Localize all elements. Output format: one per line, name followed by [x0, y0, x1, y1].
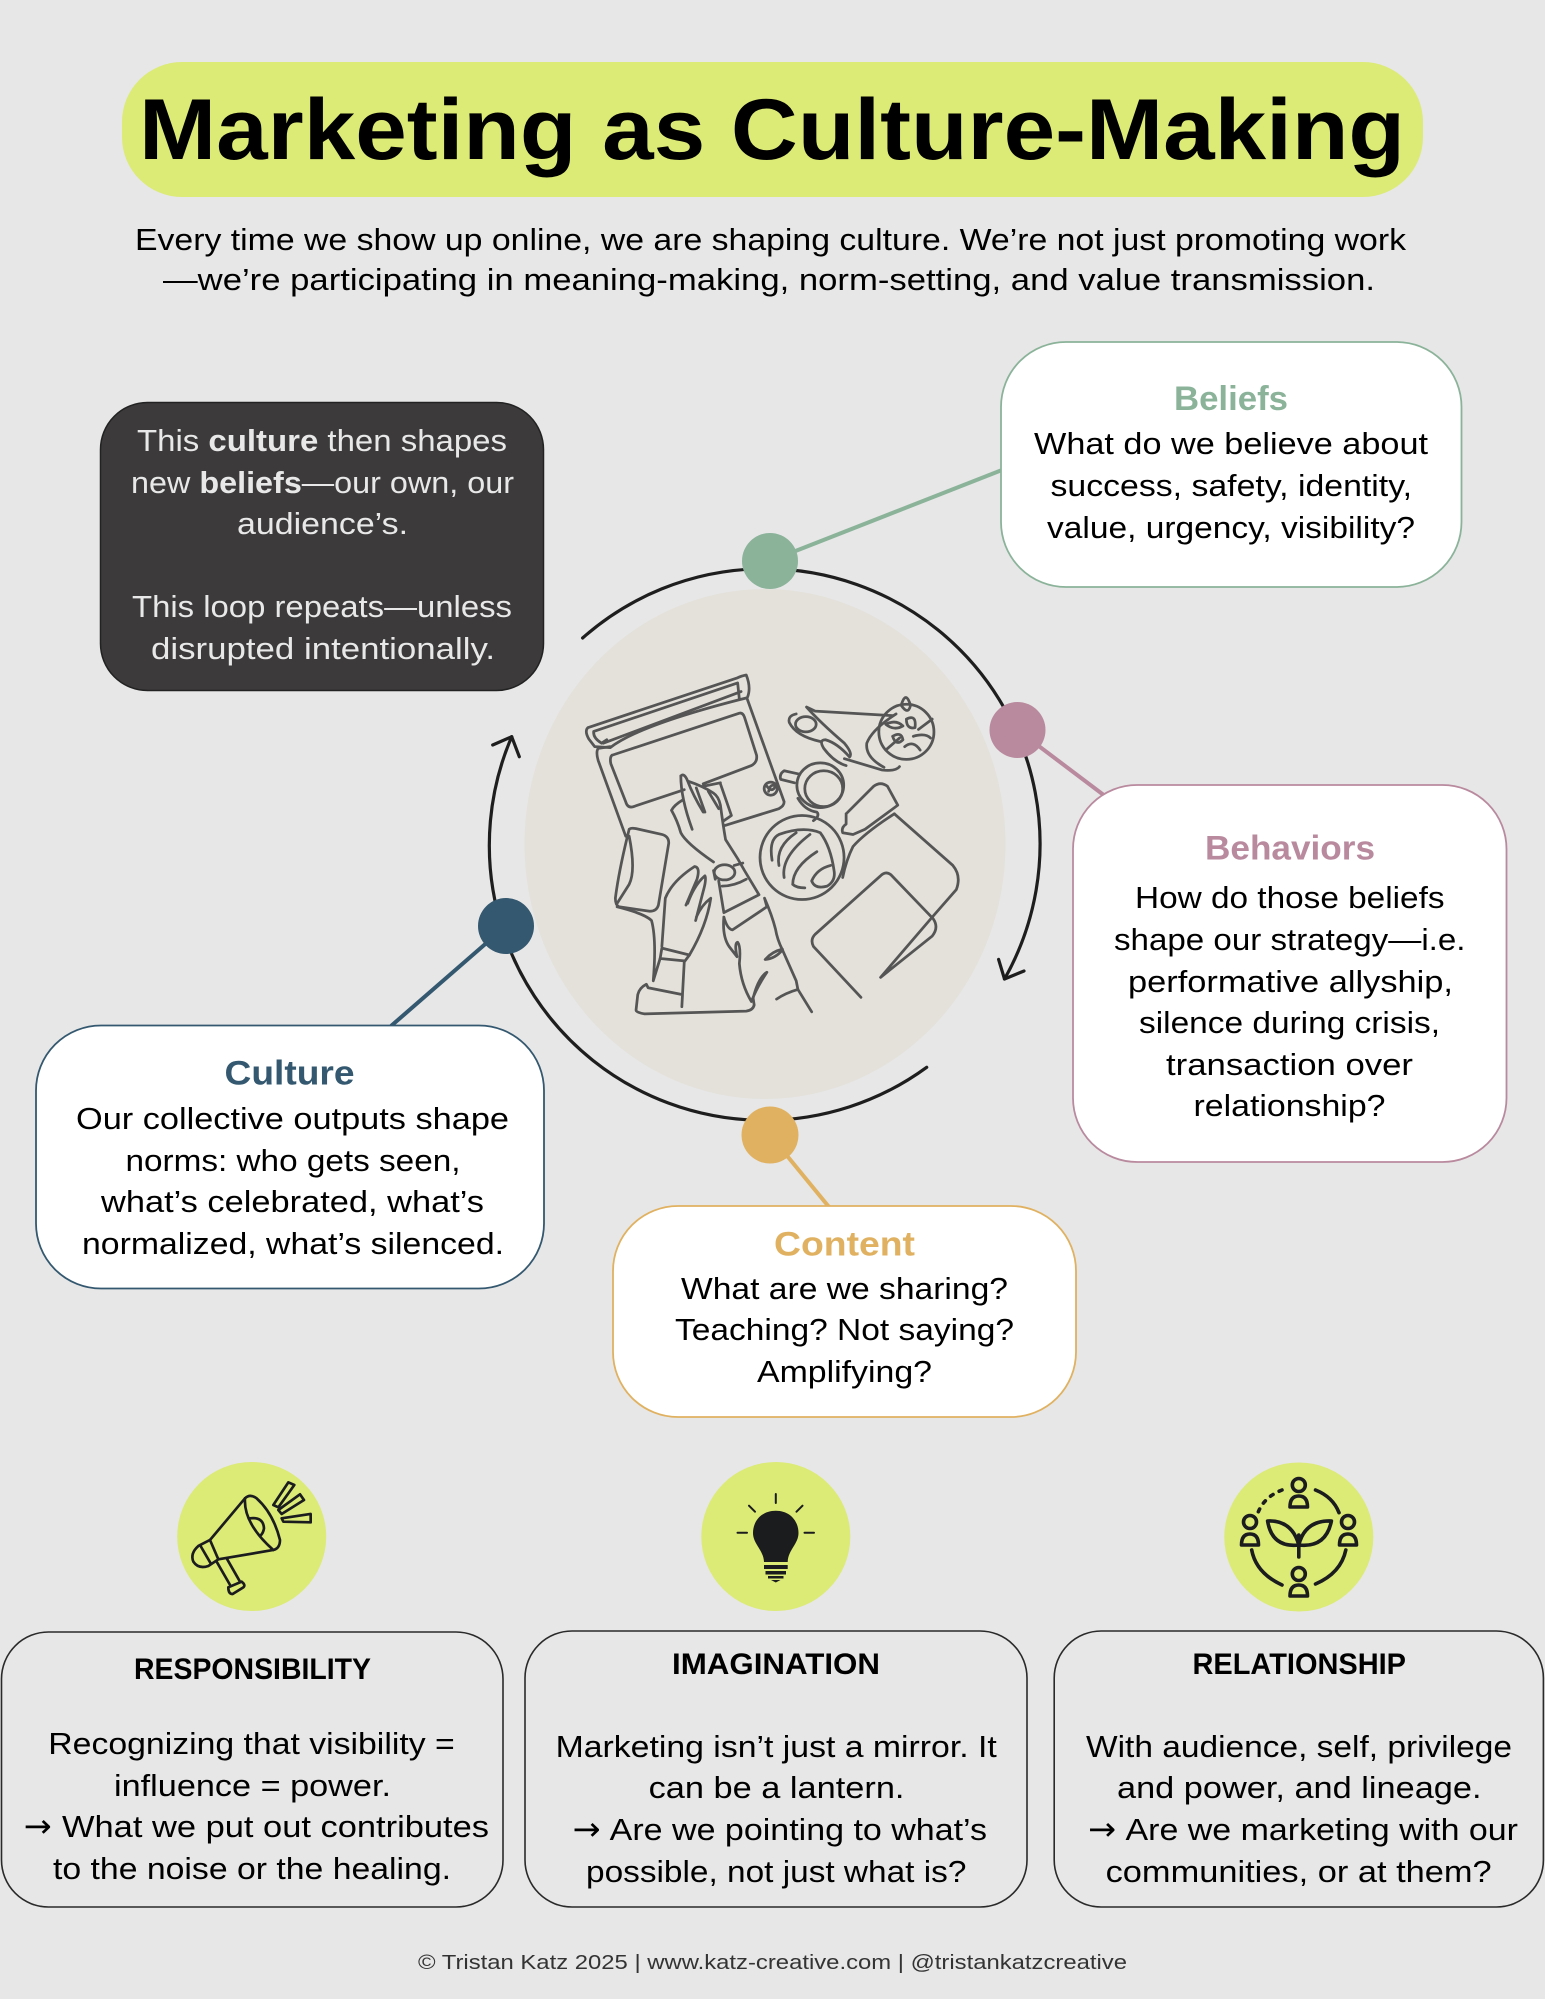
panel: responsibility: What we put out contributes	[62, 1809, 489, 1844]
panel: relationship: and power, and lineage.	[1117, 1770, 1482, 1805]
panel: behaviors: transaction over	[1166, 1047, 1413, 1082]
panel: beliefs: What do we believe about	[1034, 426, 1428, 461]
panel: culture: norms: who gets seen,	[126, 1143, 461, 1178]
dark callout: loop repeats: This loop repeats—unless	[132, 589, 512, 624]
panel: imagination	[525, 1631, 1027, 1907]
panel: behaviors: performative allyship,	[1128, 964, 1453, 999]
node: beliefs	[742, 533, 798, 589]
icon: light bulb	[701, 1462, 850, 1611]
panel: behaviors	[1073, 785, 1506, 1162]
title: Marketing as Culture-Making	[139, 82, 1405, 178]
intro text	[135, 222, 1407, 297]
panel: culture: Our collective outputs shape	[76, 1101, 509, 1136]
panel: behaviors: relationship?	[1194, 1088, 1386, 1123]
central beige circle	[524, 589, 1006, 1099]
panel: responsibility: influence = power.	[114, 1768, 391, 1803]
panel: behaviors: Behaviors	[1205, 830, 1375, 868]
panel: relationship: With audience, self, privilege	[1086, 1729, 1512, 1764]
footer credit: © Tristan Katz 2025 | www.katz-creative.com | @tristankatzcreative	[418, 1951, 1127, 1974]
intro text: Every time we show up online, we are shaping culture. We’re not just promoting work	[135, 222, 1407, 257]
panel: content: Amplifying?	[757, 1354, 932, 1389]
panel: responsibility: Recognizing that visibility =	[48, 1726, 455, 1761]
dark callout: loop repeats: disrupted intentionally.	[151, 631, 495, 666]
panel: culture	[36, 1026, 544, 1288]
panel: behaviors: How do those beliefs	[1135, 880, 1444, 915]
panel: beliefs	[1001, 342, 1462, 587]
panel: responsibility: →	[24, 1807, 52, 1845]
panel: relationship: communities, or at them?	[1106, 1854, 1492, 1889]
panel: relationship: Are we marketing with our	[1126, 1812, 1518, 1847]
dark callout: loop repeats: audience’s.	[237, 506, 408, 541]
panel: culture: Culture	[224, 1054, 354, 1092]
panel: imagination: Marketing isn’t just a mirror. It	[556, 1729, 997, 1764]
panel: imagination: can be a lantern.	[649, 1770, 904, 1805]
panel: relationship: →	[1088, 1810, 1116, 1848]
connector: beliefs	[770, 470, 1002, 561]
panel: responsibility	[2, 1632, 503, 1907]
node: behaviors	[990, 702, 1046, 758]
panel: relationship	[1054, 1631, 1543, 1907]
panel: culture: normalized, what’s silenced.	[82, 1226, 504, 1261]
panel: beliefs: success, safety, identity,	[1050, 468, 1412, 503]
icon: community circle with sprout	[1224, 1462, 1373, 1612]
panel: beliefs: value, urgency, visibility?	[1047, 510, 1415, 545]
connector: culture	[391, 926, 506, 1026]
line art illustration: desk with laptop, hands, coffee, croissant	[586, 675, 958, 1014]
icon: megaphone	[177, 1462, 326, 1611]
panel: content: What are we sharing?	[681, 1271, 1008, 1306]
panel: content: Teaching? Not saying?	[675, 1312, 1014, 1347]
panel: relationship: RELATIONSHIP	[1192, 1648, 1406, 1681]
node: culture	[478, 898, 534, 954]
panel: behaviors: silence during crisis,	[1139, 1005, 1440, 1040]
panel: content	[613, 1206, 1076, 1417]
panel: imagination: →	[572, 1810, 600, 1848]
panel: imagination: IMAGINATION	[672, 1648, 880, 1681]
dark callout: loop repeats	[100, 402, 544, 690]
connector: behaviors	[1018, 730, 1105, 796]
panel: responsibility: RESPONSIBILITY	[134, 1653, 371, 1686]
node: content	[742, 1106, 798, 1164]
title	[122, 62, 1423, 197]
panel: content: Content	[774, 1226, 915, 1264]
dark callout: loop repeats: This culture then shapes	[137, 423, 507, 458]
panel: behaviors: shape our strategy—i.e.	[1114, 922, 1466, 957]
panel: imagination: possible, not just what is?	[586, 1854, 966, 1889]
panel: culture: what’s celebrated, what’s	[100, 1184, 484, 1219]
panel: imagination: Are we pointing to what’s	[610, 1812, 987, 1847]
loop arc: content to culture	[489, 737, 927, 1120]
panel: responsibility: to the noise or the healing.	[53, 1851, 451, 1886]
loop arc: beliefs to behaviors	[583, 569, 1040, 979]
panel: beliefs: Beliefs	[1174, 380, 1288, 418]
dark callout: loop repeats: new beliefs—our own, our	[131, 465, 514, 500]
connector: content	[770, 1135, 829, 1207]
intro text: —we’re participating in meaning-making, norm-setting, and value transmission.	[163, 262, 1375, 297]
